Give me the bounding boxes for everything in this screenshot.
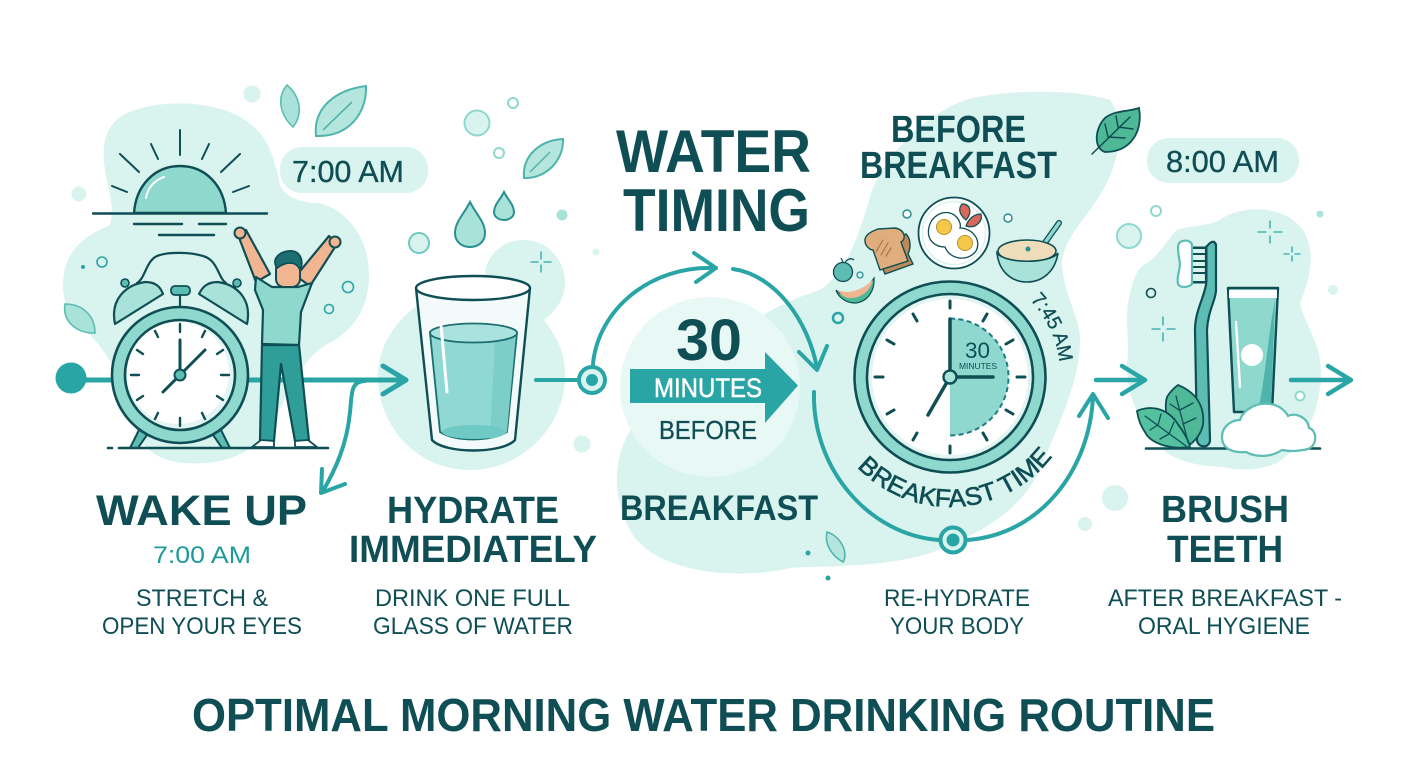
step: brush teeth caption: TEETH [1167,529,1283,571]
background blob: breakfast [617,92,1119,574]
heading: before breakfast: BREAKFAST [860,145,1057,187]
icon: oatmeal bowl [997,223,1059,282]
background blob: brush teeth [1127,209,1321,470]
icon: breakfast clock with 30 minute wedge: MINUTES [959,361,997,371]
ground line: wake up [108,447,328,449]
pill: 8:00 AM [1147,138,1299,183]
icon: egg plate [918,198,990,268]
icon: toast [865,228,913,274]
arrow: branch down to wake up caption [321,381,365,493]
title: routine footer: OPTIMAL MORNING WATER DRINKING ROUTINE [192,689,1215,741]
step: brush teeth caption: ORAL HYGIENE [1138,613,1310,640]
step: wake up caption [96,487,307,640]
arrow: arc under breakfast clock [814,392,1108,552]
callout: 30 minutes before: 30 [676,308,742,373]
callout: 30 minutes before: MINUTES [654,373,762,403]
step: hydrate caption: IMMEDIATELY [349,529,597,571]
label: breakfast time along clock: BREAKFAST TIME [858,446,1052,508]
arrow: into brush teeth [1096,366,1145,394]
heading: before breakfast [860,109,1057,187]
icon: leaves top left [65,85,366,333]
connector: glass to node [536,367,605,393]
icon: breakfast foods [834,198,1059,303]
icon: mint leaf top right [1092,108,1140,154]
step: hydrate caption: GLASS OF WATER [373,613,573,640]
step: re-hydrate caption [884,585,1030,640]
icon: toothbrush [1178,241,1216,446]
step: brush teeth caption: BRUSH [1161,489,1289,531]
arrow: arc down to breakfast [733,269,827,370]
icon: water drops and leaf [455,139,563,247]
step: wake up caption: 7:00 AM [153,542,251,569]
callout: 30 minutes before: BEFORE [659,415,757,445]
step: wake up caption: WAKE UP [96,487,307,535]
background blob: wake up [63,103,369,463]
arrow: arc up to timing [593,253,716,364]
step: wake up caption: OPEN YOUR EYES [102,613,302,640]
step: hydrate caption: DRINK ONE FULL [375,585,570,612]
icon: breakfast clock with 30 minute wedge [854,282,1046,472]
icon: small leaf below clock [826,532,845,562]
step: hydrate caption: HYDRATE [387,490,559,532]
icon: apple and melon [834,258,874,303]
pill: 7:00 AM [280,147,428,193]
heading: water timing: WATER [616,118,811,185]
step: breakfast caption: BREAKFAST [620,489,818,528]
heading: water timing: TIMING [623,177,810,244]
step: hydrate caption [349,490,597,640]
ground line: brush teeth [1146,447,1320,450]
step: wake up caption: STRETCH & [136,585,268,612]
pill: 8:00 AM: 8:00 AM [1166,144,1279,179]
icon: glass of water [416,276,530,450]
heading: before breakfast: BEFORE [891,109,1026,151]
step: brush teeth caption: AFTER BREAKFAST - [1108,585,1342,612]
step: brush teeth caption [1108,489,1342,640]
icon: stretching person [234,228,340,447]
icon: mint leaves [1137,385,1203,448]
icon: toothpaste tube [1228,288,1278,412]
arrow: out of brush teeth [1291,366,1351,394]
icon: alarm clock [112,253,248,448]
background circle: 30 minutes [620,297,800,477]
timeline: main arrow [56,362,406,394]
callout: 30 minutes before [630,308,798,445]
heading: water timing [616,118,811,244]
icon: breakfast clock with 30 minute wedge: 30 [965,338,990,363]
step: re-hydrate caption: RE-HYDRATE [884,585,1030,612]
decorative dots and bubbles [72,86,1338,580]
icon: sunrise [93,130,267,235]
pill: 7:00 AM: 7:00 AM [292,154,404,189]
label: 7:45 AM along clock: 7:45 AM [1032,291,1073,361]
background blob: glass [378,240,565,470]
icon: foam cloud [1222,404,1315,456]
step: re-hydrate caption: YOUR BODY [890,613,1024,640]
